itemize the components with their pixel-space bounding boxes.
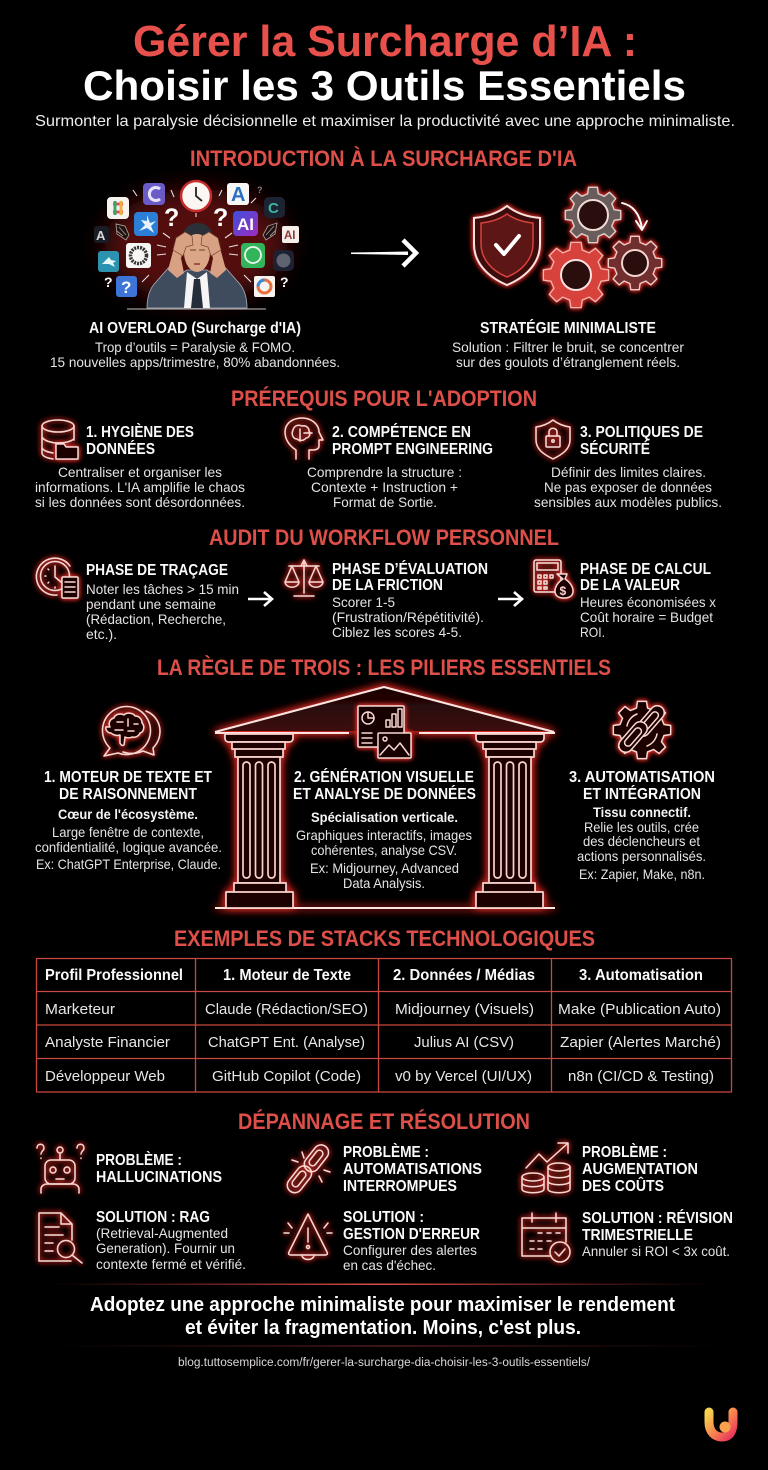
text: data hygiene: si les données sont désordonnées.: [35, 494, 245, 510]
icon: broken chain: [284, 1142, 332, 1196]
icon: brain in speech bubble: [102, 707, 160, 756]
text: prompt engineering: 2. COMPÉTENCE EN: [332, 424, 471, 441]
text: friction evaluation: [332, 561, 488, 640]
text: problem costs: [582, 1144, 698, 1195]
icon: confused robot: [37, 1144, 84, 1193]
table row: marketer: Make (Publication Auto): [558, 1001, 721, 1018]
closing statement: Adoptez une approche minimaliste pour maximiser le rendement: [90, 1294, 675, 1316]
text: friction evaluation: Ciblez les scores 4-5.: [332, 624, 462, 640]
illustration: overwhelmed man surrounded by apps: [94, 181, 299, 309]
icon: dashboard and picture: [358, 706, 411, 758]
text: data hygiene: [35, 424, 245, 510]
text: prompt engineering: PROMPT ENGINEERING: [332, 441, 493, 458]
icon: warning triangle: [284, 1214, 332, 1260]
text: ai overload: 15 nouvelles apps/trimestre, 80% abandonnées.: [50, 354, 340, 370]
panel: tech stacks table: [36, 926, 732, 1092]
illustration: overwhelmed man surrounded by apps: ?: [257, 185, 262, 195]
text: problem automations: [343, 1144, 482, 1195]
panel: workflow audit: [36, 525, 716, 642]
heading: prerequisites: PRÉREQUIS POUR L'ADOPTION: [231, 386, 537, 411]
text: solution error handling: en cas d'échec.: [343, 1257, 436, 1273]
text: friction evaluation: Scorer 1-5: [332, 594, 395, 610]
table row: financial analyst: [45, 1034, 721, 1051]
text: pillar three: ET INTÉGRATION: [583, 786, 701, 803]
text: data hygiene: DONNÉES: [86, 441, 155, 458]
text: pillar one: Large fenêtre de contexte,: [52, 824, 204, 840]
table row: web developer: n8n (CI/CD & Testing): [568, 1068, 714, 1085]
text: value calculation: PHASE DE CALCUL: [580, 561, 711, 578]
icon: document with magnifier: [39, 1213, 82, 1263]
icon: shield with padlock: [536, 420, 570, 459]
text: minimalist strategy: sur des goulots d’étranglement réels.: [456, 354, 680, 370]
text: value calculation: ROI.: [580, 624, 605, 640]
panel: troubleshooting: [37, 1109, 733, 1273]
text: friction evaluation: DE LA FRICTION: [332, 577, 443, 594]
text: problem costs: PROBLÈME :: [582, 1144, 667, 1161]
text: pillar three: [569, 769, 715, 882]
icon: gears: [543, 187, 662, 308]
text: solution quarterly review: [582, 1210, 733, 1259]
heading: introduction: INTRODUCTION À LA SURCHARGE D'IA: [190, 146, 577, 171]
arrow: overload to strategy: [351, 240, 416, 266]
table row: financial analyst: ChatGPT Ent. (Analyse): [208, 1034, 365, 1051]
text: security policies: Ne pas exposer de données: [544, 479, 712, 495]
heading: rule of three: LA RÈGLE DE TROIS : LES PILIERS ESSENTIELS: [157, 655, 611, 680]
text: pillar three: Tissu connectif.: [593, 804, 691, 820]
text: pillar two: cohérentes, analyse CSV.: [311, 842, 457, 858]
text: value calculation: Heures économisées x: [580, 594, 716, 610]
text: minimalist strategy: STRATÉGIE MINIMALISTE: [480, 320, 656, 337]
text: ai overload: [50, 320, 340, 370]
source url: blog.tuttosemplice.com/fr/gerer-la-surcharge-dia-choisir-les-3-outils-essentiels/: [178, 1357, 591, 1369]
closing statement: [90, 1294, 675, 1339]
title: Gérer la Surcharge d’IA :: [133, 17, 637, 66]
text: tracking phase: etc.).: [86, 626, 117, 642]
title: [83, 17, 686, 109]
subtitle: Surmonter la paralysie décisionnelle et maximiser la productivité avec une approche minimaliste.: [35, 113, 735, 130]
text: problem automations: PROBLÈME :: [343, 1144, 429, 1161]
text: solution rag: SOLUTION : RAG: [96, 1209, 210, 1226]
table row: web developer: GitHub Copilot (Code): [212, 1068, 361, 1085]
text: solution quarterly review: SOLUTION : RÉVISION: [582, 1210, 733, 1227]
table header row: Profil Professionnel: [45, 967, 183, 984]
illustration: overwhelmed man surrounded by apps: ?: [164, 204, 179, 232]
text: pillar three: des déclencheurs et: [583, 833, 700, 849]
text: solution quarterly review: Annuler si ROI < 3x coût.: [582, 1243, 730, 1259]
icon: coins with rising arrow: [522, 1143, 570, 1193]
illustration: greek temple with two columns: [215, 687, 555, 908]
text: pillar three: actions personnalisés.: [577, 848, 706, 864]
text: prompt engineering: Contexte + Instruction +: [311, 479, 458, 495]
table header row: [45, 967, 703, 984]
text: solution error handling: GESTION D'ERREUR: [343, 1226, 480, 1243]
text: problem automations: INTERROMPUES: [343, 1178, 457, 1195]
arrow: tracking to evaluation: [248, 592, 272, 606]
text: problem automations: AUTOMATISATIONS: [343, 1161, 482, 1178]
panel: rule of three: [35, 655, 715, 908]
table header row: 2. Données / Médias: [393, 967, 535, 984]
text: security policies: [534, 424, 722, 510]
text: solution rag: (Retrieval-Augmented: [96, 1225, 228, 1241]
text: pillar one: Ex: ChatGPT Enterprise, Claude.: [36, 856, 221, 872]
text: prompt engineering: Comprendre la structure :: [307, 464, 462, 480]
illustration: overwhelmed man surrounded by apps: C: [268, 200, 279, 217]
logo: [709, 1412, 733, 1437]
text: solution error handling: Configurer des alertes: [343, 1242, 477, 1258]
table row: web developer: v0 by Vercel (UI/UX): [395, 1068, 532, 1085]
illustration: overwhelmed man surrounded by apps: ?: [104, 274, 113, 290]
text: tracking phase: Noter les tâches > 15 min: [86, 581, 239, 597]
table row: marketer: Midjourney (Visuels): [395, 1001, 534, 1018]
icon: database and folder: [42, 420, 78, 459]
text: pillar one: DE RAISONNEMENT: [59, 786, 197, 803]
text: pillar two: ET ANALYSE DE DONNÉES: [293, 786, 476, 803]
text: solution rag: contexte fermé et vérifié.: [96, 1256, 246, 1272]
table grid: [36, 958, 732, 1092]
arrow: evaluation to value: [498, 592, 522, 606]
text: value calculation: Coût horaire = Budget: [580, 609, 713, 625]
icon: calculator and money bag: [534, 560, 573, 598]
table row: financial analyst: Zapier (Alertes Marché): [560, 1034, 721, 1051]
illustration: overwhelmed man surrounded by apps: A: [96, 228, 106, 243]
text: pillar two: Ex: Midjourney, Advanced: [310, 860, 459, 876]
text: security policies: SÉCURITÉ: [580, 441, 650, 458]
text: problem hallucinations: HALLUCINATIONS: [96, 1169, 222, 1186]
text: pillar one: confidentialité, logique avancée.: [35, 839, 222, 855]
title: Choisir les 3 Outils Essentiels: [83, 62, 686, 109]
table row: financial analyst: Julius AI (CSV): [414, 1034, 514, 1051]
text: pillar two: Graphiques interactifs, images: [296, 827, 472, 843]
text: pillar two: [293, 769, 476, 891]
heading: troubleshooting: DÉPANNAGE ET RÉSOLUTION: [238, 1109, 530, 1134]
text: security policies: Définir des limites claires.: [551, 464, 706, 480]
text: solution rag: [96, 1209, 246, 1272]
panel: prerequisites: [35, 386, 722, 510]
text: minimalist strategy: [452, 320, 684, 370]
icon: shield with check: [474, 206, 540, 285]
text: solution error handling: [343, 1209, 480, 1273]
text: value calculation: DE LA VALEUR: [580, 577, 680, 594]
text: problem costs: DES COÛTS: [582, 1177, 664, 1195]
illustration: overwhelmed man surrounded by apps: AI: [237, 215, 254, 234]
illustration: overwhelmed man surrounded by apps: ?: [121, 278, 131, 297]
text: data hygiene: Centraliser et organiser les: [58, 464, 222, 480]
text: value calculation: [580, 561, 716, 640]
text: minimalist strategy: Solution : Filtrer le bruit, se concentrer: [452, 339, 684, 355]
text: solution rag: Generation). Fournir un: [96, 1240, 235, 1256]
table row: web developer: [45, 1068, 714, 1085]
table row: web developer: Développeur Web: [45, 1068, 165, 1085]
text: friction evaluation: PHASE D’ÉVALUATION: [332, 561, 488, 578]
heading: tech stacks: EXEMPLES DE STACKS TECHNOLOGIQUES: [174, 926, 595, 951]
text: pillar three: Relie les outils, crée: [584, 819, 699, 835]
illustration: overwhelmed man surrounded by apps: AI: [284, 230, 296, 242]
text: security policies: 3. POLITIQUES DE: [580, 424, 703, 441]
heading: workflow audit: AUDIT DU WORKFLOW PERSONNEL: [209, 525, 559, 550]
icon: gear with chain link: [613, 701, 671, 759]
panel: introduction: [50, 146, 684, 370]
text: pillar two: Data Analysis.: [343, 875, 425, 891]
text: tracking phase: pendant une semaine: [86, 596, 216, 612]
text: security policies: sensibles aux modèles publics.: [534, 494, 722, 510]
text: data hygiene: informations. L'IA amplifie le chaos: [35, 479, 245, 495]
icon: head with brain circuit: [285, 418, 323, 459]
text: data hygiene: 1. HYGIÈNE DES: [86, 424, 194, 441]
closing statement: et éviter la fragmentation. Moins, c'est plus.: [185, 1317, 581, 1339]
text: prompt engineering: Format de Sortie.: [333, 494, 437, 510]
table row: marketer: Marketeur: [45, 1001, 115, 1018]
illustration: overwhelmed man surrounded by apps: ?: [213, 204, 228, 232]
text: pillar two: Spécialisation verticale.: [311, 809, 458, 825]
text: problem costs: AUGMENTATION: [582, 1161, 698, 1178]
text: pillar three: Ex: Zapier, Make, n8n.: [579, 866, 705, 882]
text: pillar one: Cœur de l'écosystème.: [58, 806, 198, 822]
table row: marketer: Claude (Rédaction/SEO): [205, 1001, 368, 1018]
text: problem hallucinations: [96, 1152, 222, 1186]
text: solution quarterly review: TRIMESTRIELLE: [582, 1227, 693, 1244]
text: solution error handling: SOLUTION :: [343, 1209, 424, 1226]
illustration: overwhelmed man surrounded by apps: ?: [280, 274, 289, 290]
text: problem hallucinations: PROBLÈME :: [96, 1152, 182, 1169]
text: tracking phase: [86, 562, 239, 642]
text: pillar two: 2. GÉNÉRATION VISUELLE: [294, 769, 474, 786]
table row: financial analyst: Analyste Financier: [45, 1034, 170, 1051]
text: tracking phase: (Rédaction, Recherche,: [86, 611, 226, 627]
illustration: overwhelmed man surrounded by apps: A: [231, 184, 245, 206]
icon: clock and log: [36, 558, 78, 598]
table header row: 1. Moteur de Texte: [223, 967, 351, 984]
table row: marketer: [45, 1001, 721, 1018]
text: prompt engineering: [307, 424, 493, 510]
text: pillar three: 3. AUTOMATISATION: [569, 769, 715, 786]
text: tracking phase: PHASE DE TRAÇAGE: [86, 562, 228, 579]
text: pillar one: 1. MOTEUR DE TEXTE ET: [44, 769, 212, 786]
icon: balance scale: [285, 560, 323, 596]
text: ai overload: Trop d’outils = Paralysie & FOMO.: [95, 339, 295, 355]
text: ai overload: AI OVERLOAD (Surcharge d'IA): [89, 320, 301, 337]
text: pillar one: [35, 769, 222, 872]
icon: calendar with check: [522, 1213, 570, 1262]
table header row: 3. Automatisation: [579, 967, 703, 984]
text: friction evaluation: (Frustration/Répétitivité).: [332, 609, 484, 625]
icon: calculator and money bag: $: [560, 584, 566, 598]
